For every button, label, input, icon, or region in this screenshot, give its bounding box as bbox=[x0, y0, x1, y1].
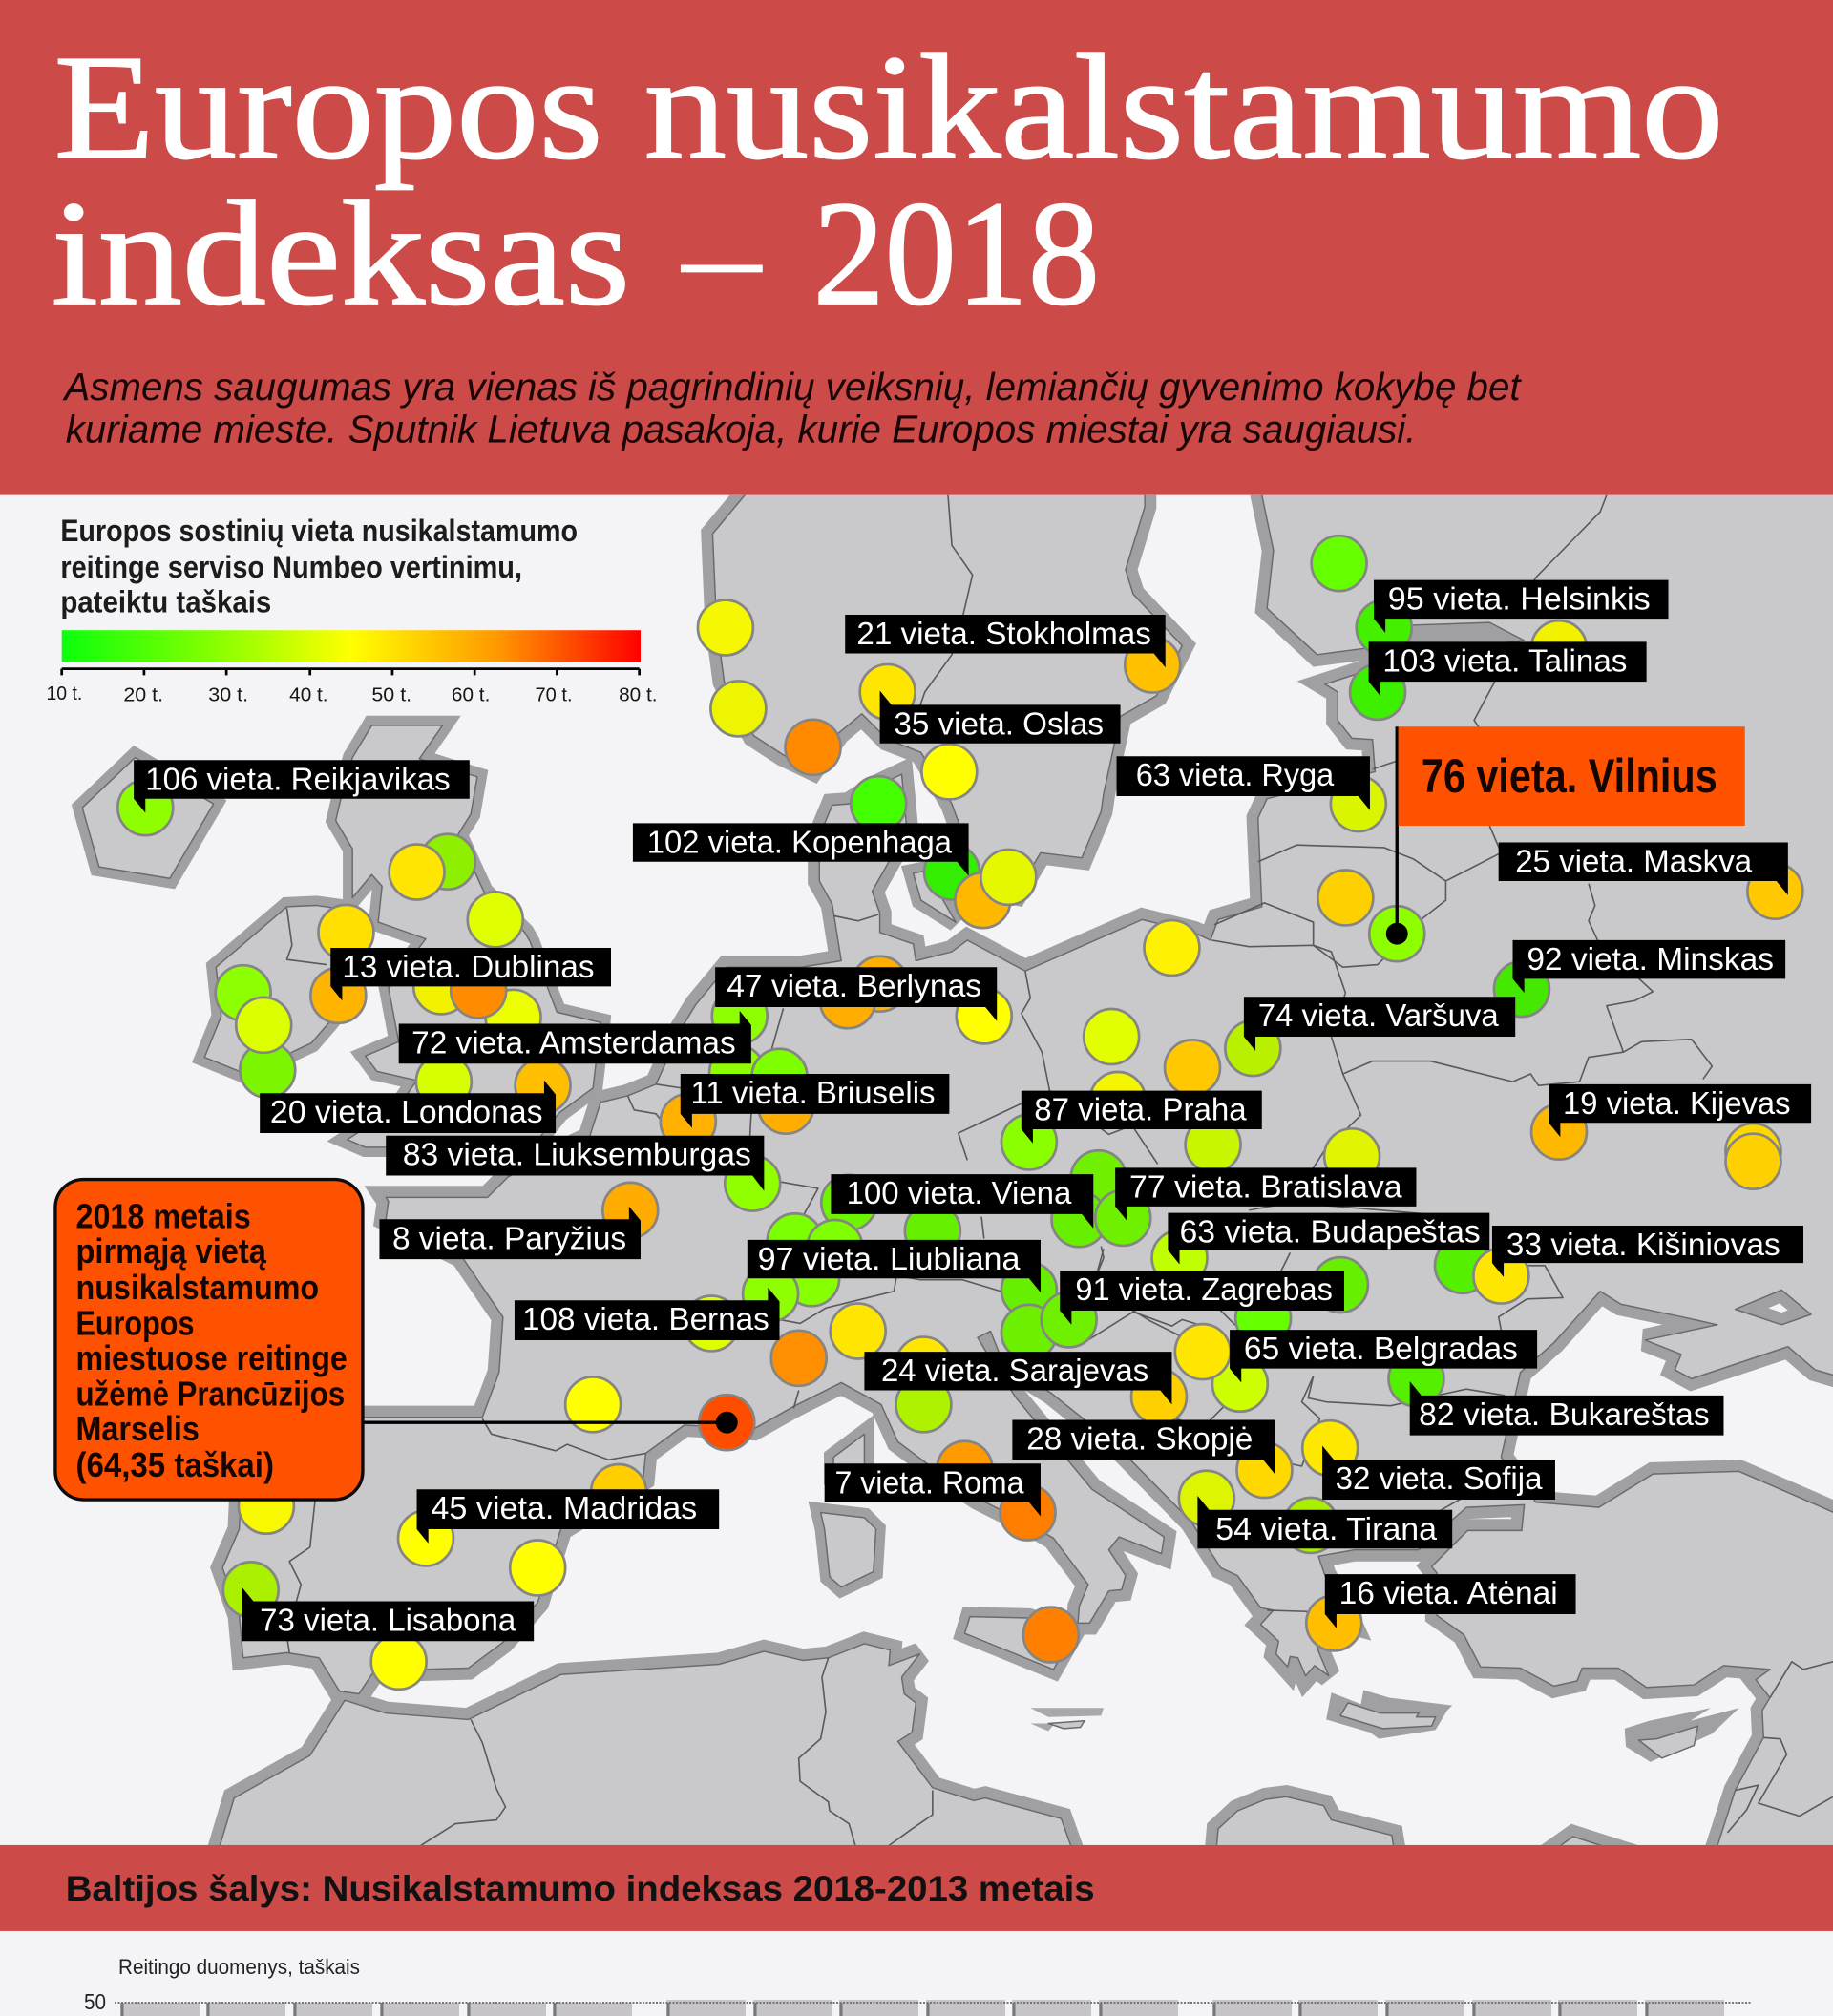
legend bbox=[47, 514, 658, 705]
label: Bratislava bbox=[1115, 1167, 1416, 1221]
label: Sarajevas: 24 vieta. Sarajevas bbox=[881, 1354, 1148, 1389]
island: Zealand bbox=[914, 871, 956, 922]
callout: Vilnius bbox=[1399, 726, 1745, 826]
label: Praha bbox=[1022, 1091, 1262, 1144]
label: Londonas: 20 vieta. Londonas bbox=[270, 1095, 543, 1130]
label: Stokholmas: 21 vieta. Stokholmas bbox=[856, 617, 1151, 652]
callout: Marseille: užėmė Prancūzijos bbox=[75, 1375, 345, 1414]
label: Stokholmas bbox=[845, 615, 1166, 667]
subtitle bbox=[62, 365, 1522, 451]
label: Helsinkis bbox=[1374, 580, 1669, 633]
header panel bbox=[0, 0, 1833, 495]
chart bars bbox=[120, 2000, 1724, 2016]
legend title: Europos sostinių vieta nusikalstamumo bbox=[60, 514, 578, 548]
city markers bbox=[117, 536, 1802, 1690]
label: Maskva bbox=[1499, 843, 1788, 895]
callout: Marseille: (64,35 taškai) bbox=[75, 1445, 274, 1484]
label: Paryžius: 8 vieta. Paryžius bbox=[392, 1221, 626, 1256]
label: Berlynas bbox=[715, 967, 997, 1021]
label: Madridas: 45 vieta. Madridas bbox=[431, 1491, 697, 1526]
label: Helsinkis: 95 vieta. Helsinkis bbox=[1388, 582, 1651, 618]
label: Viena bbox=[831, 1174, 1093, 1228]
island: Malta bbox=[1030, 1708, 1104, 1732]
marker: Marseille bbox=[699, 1395, 754, 1450]
leader line: Vilnius bbox=[1396, 726, 1398, 934]
label: Bernas bbox=[515, 1288, 780, 1340]
label: Sofija: 32 vieta. Sofija bbox=[1336, 1461, 1543, 1497]
label: Budapeštas bbox=[1168, 1213, 1489, 1264]
label: Ryga bbox=[1117, 756, 1370, 810]
label: Sarajevas bbox=[864, 1352, 1171, 1404]
scale labels: 60 t. bbox=[452, 684, 490, 705]
label: Reikjavikas bbox=[134, 760, 470, 813]
scale labels: 30 t. bbox=[208, 684, 248, 705]
label: Varšuva: 74 vieta. Varšuva bbox=[1258, 998, 1499, 1034]
island: Crete bbox=[1326, 1690, 1452, 1739]
legend title: pateiktu taškais bbox=[60, 584, 271, 619]
label: Amsterdamas: 72 vieta. Amsterdamas bbox=[411, 1025, 736, 1060]
label: Lisabona bbox=[242, 1587, 534, 1641]
label: Liubliana bbox=[748, 1240, 1041, 1292]
label: Liuksemburgas bbox=[386, 1136, 764, 1191]
label: Reikjavikas: 106 vieta. Reikjavikas bbox=[145, 762, 451, 797]
label: Bratislava: 77 vieta. Bratislava bbox=[1129, 1169, 1402, 1205]
label: Kišiniovas: 33 vieta. Kišiniovas bbox=[1506, 1228, 1780, 1263]
sea: Black Sea bbox=[1501, 1292, 1833, 1518]
label: Talinas bbox=[1369, 641, 1647, 696]
label: Paryžius bbox=[379, 1207, 641, 1259]
callout: Marseille bbox=[55, 1180, 363, 1500]
island: Cyprus bbox=[1625, 1708, 1739, 1762]
island: Ireland bbox=[204, 906, 360, 1081]
label: Maskva: 25 vieta. Maskva bbox=[1515, 845, 1752, 880]
title: indeksas bbox=[52, 170, 630, 336]
callout: Marseille: 2018 metais bbox=[75, 1197, 251, 1236]
label: Roma: 7 vieta. Roma bbox=[834, 1465, 1024, 1501]
label: Liuksemburgas: 83 vieta. Liuksemburgas bbox=[403, 1138, 751, 1173]
label: Atėnai: 16 vieta. Atėnai bbox=[1339, 1576, 1558, 1611]
island: Great Britain bbox=[336, 725, 600, 1147]
bar chart bbox=[84, 1955, 1752, 2016]
label: Budapeštas: 63 vieta. Budapeštas bbox=[1180, 1215, 1481, 1250]
label: Skopjė bbox=[1012, 1419, 1275, 1474]
chart y label: 50 bbox=[84, 1989, 106, 2014]
label: Dublinas: 13 vieta. Dublinas bbox=[342, 950, 594, 985]
label: Kišiniovas bbox=[1492, 1226, 1803, 1277]
subtitle: kuriame mieste. Sputnik Lietuva pasakoja, kurie Europos miestai yra saugiausi. bbox=[66, 407, 1416, 451]
section heading band: Baltijos šalys: Nusikalstamumo indeksas 2018-2013 metais bbox=[66, 1868, 1095, 1908]
scale labels: 20 t. bbox=[123, 684, 163, 705]
subtitle: Asmens saugumas yra vienas iš pagrindinių veiksnių, lemiančių gyvenimo kokybę bet bbox=[62, 365, 1522, 409]
label: Praha: 87 vieta. Praha bbox=[1034, 1093, 1247, 1128]
label: Belgradas: 65 vieta. Belgradas bbox=[1244, 1332, 1518, 1367]
scale labels: 10 t. bbox=[47, 683, 82, 704]
label: Zagrebas bbox=[1060, 1270, 1344, 1325]
scale labels: 40 t. bbox=[289, 684, 328, 705]
sea: Atlantic, Baltic and Mediterranean bbox=[0, 482, 1770, 1858]
label: Viena: 100 vieta. Viena bbox=[847, 1176, 1072, 1211]
callout: Marseille: miestuose reitinge bbox=[75, 1338, 348, 1377]
label: Sofija bbox=[1322, 1445, 1555, 1500]
scale labels bbox=[47, 683, 658, 705]
island: Iceland bbox=[82, 758, 214, 878]
callout: Marseille: Europos bbox=[75, 1304, 194, 1343]
scale axis bbox=[62, 669, 640, 675]
label: Briuselis bbox=[681, 1074, 949, 1128]
label: Minskas bbox=[1513, 940, 1785, 993]
scale labels: 50 t. bbox=[371, 684, 411, 705]
label: Oslas bbox=[880, 691, 1121, 744]
label: Kopenhaga: 102 vieta. Kopenhaga bbox=[647, 825, 952, 860]
chart axis title: Reitingo duomenys, taškais bbox=[118, 1955, 360, 1979]
label: Briuselis: 11 vieta. Briuselis bbox=[691, 1076, 936, 1111]
label: Kijevas: 19 vieta. Kijevas bbox=[1563, 1086, 1791, 1122]
label: Tirana bbox=[1197, 1496, 1452, 1548]
label: Zagrebas: 91 vieta. Zagrebas bbox=[1075, 1272, 1333, 1308]
label: Varšuva bbox=[1244, 997, 1515, 1051]
label: Londonas bbox=[260, 1081, 556, 1133]
label: Lisabona: 73 vieta. Lisabona bbox=[260, 1603, 516, 1638]
callout: Marseille: nusikalstamumo bbox=[75, 1268, 319, 1307]
label: Skopjė: 28 vieta. Skopjė bbox=[1026, 1421, 1253, 1457]
colour scale bbox=[62, 630, 641, 662]
label: Minskas: 92 vieta. Minskas bbox=[1527, 942, 1774, 977]
label: Talinas: 103 vieta. Talinas bbox=[1382, 643, 1627, 679]
island: Sicily bbox=[965, 1617, 1074, 1670]
section heading band bbox=[0, 1845, 1833, 1931]
marker: Vilnius bbox=[1369, 906, 1424, 961]
leader line: Marseille bbox=[364, 1421, 727, 1423]
scale labels: 70 t. bbox=[536, 684, 573, 705]
label: Oslas: 35 vieta. Oslas bbox=[894, 706, 1104, 742]
label: Bernas: 108 vieta. Bernas bbox=[522, 1302, 769, 1337]
label: Bukareštas: 82 vieta. Bukareštas bbox=[1419, 1397, 1710, 1433]
label: Kopenhaga bbox=[633, 823, 969, 876]
scale labels: 80 t. bbox=[619, 684, 658, 705]
callout: Marseille: pirmąją vietą bbox=[75, 1231, 267, 1270]
title bbox=[52, 24, 1723, 336]
callout: Vilnius: 76 vieta. Vilnius bbox=[1422, 749, 1717, 803]
label: Kijevas bbox=[1549, 1084, 1811, 1137]
label: Atėnai bbox=[1325, 1574, 1576, 1628]
legend title bbox=[60, 514, 578, 619]
title: 2018 bbox=[813, 170, 1100, 336]
label: Berlynas: 47 vieta. Berlynas bbox=[727, 969, 981, 1004]
title: – bbox=[680, 170, 763, 336]
label: Tirana: 54 vieta. Tirana bbox=[1215, 1512, 1437, 1547]
callout: Marseille: Marselis bbox=[75, 1409, 200, 1448]
island: Corsica bbox=[833, 1434, 864, 1475]
label: Amsterdamas bbox=[399, 1011, 751, 1063]
label: Ryga: 63 vieta. Ryga bbox=[1136, 758, 1334, 793]
sea: Azov bbox=[1736, 1290, 1811, 1325]
title: Europos nusikalstamumo bbox=[54, 24, 1723, 190]
label: Bukareštas bbox=[1410, 1381, 1723, 1436]
map of Europe bbox=[0, 482, 1833, 1858]
label: Belgradas bbox=[1230, 1330, 1537, 1382]
label: Roma bbox=[825, 1463, 1041, 1517]
label: Dublinas bbox=[330, 948, 611, 1000]
label: Liubliana: 97 vieta. Liubliana bbox=[758, 1242, 1021, 1277]
island: Sardinia bbox=[821, 1513, 876, 1587]
legend title: reitinge serviso Numbeo vertinimu, bbox=[60, 550, 522, 584]
label: Madridas bbox=[417, 1489, 719, 1544]
country borders bbox=[286, 495, 1833, 1845]
